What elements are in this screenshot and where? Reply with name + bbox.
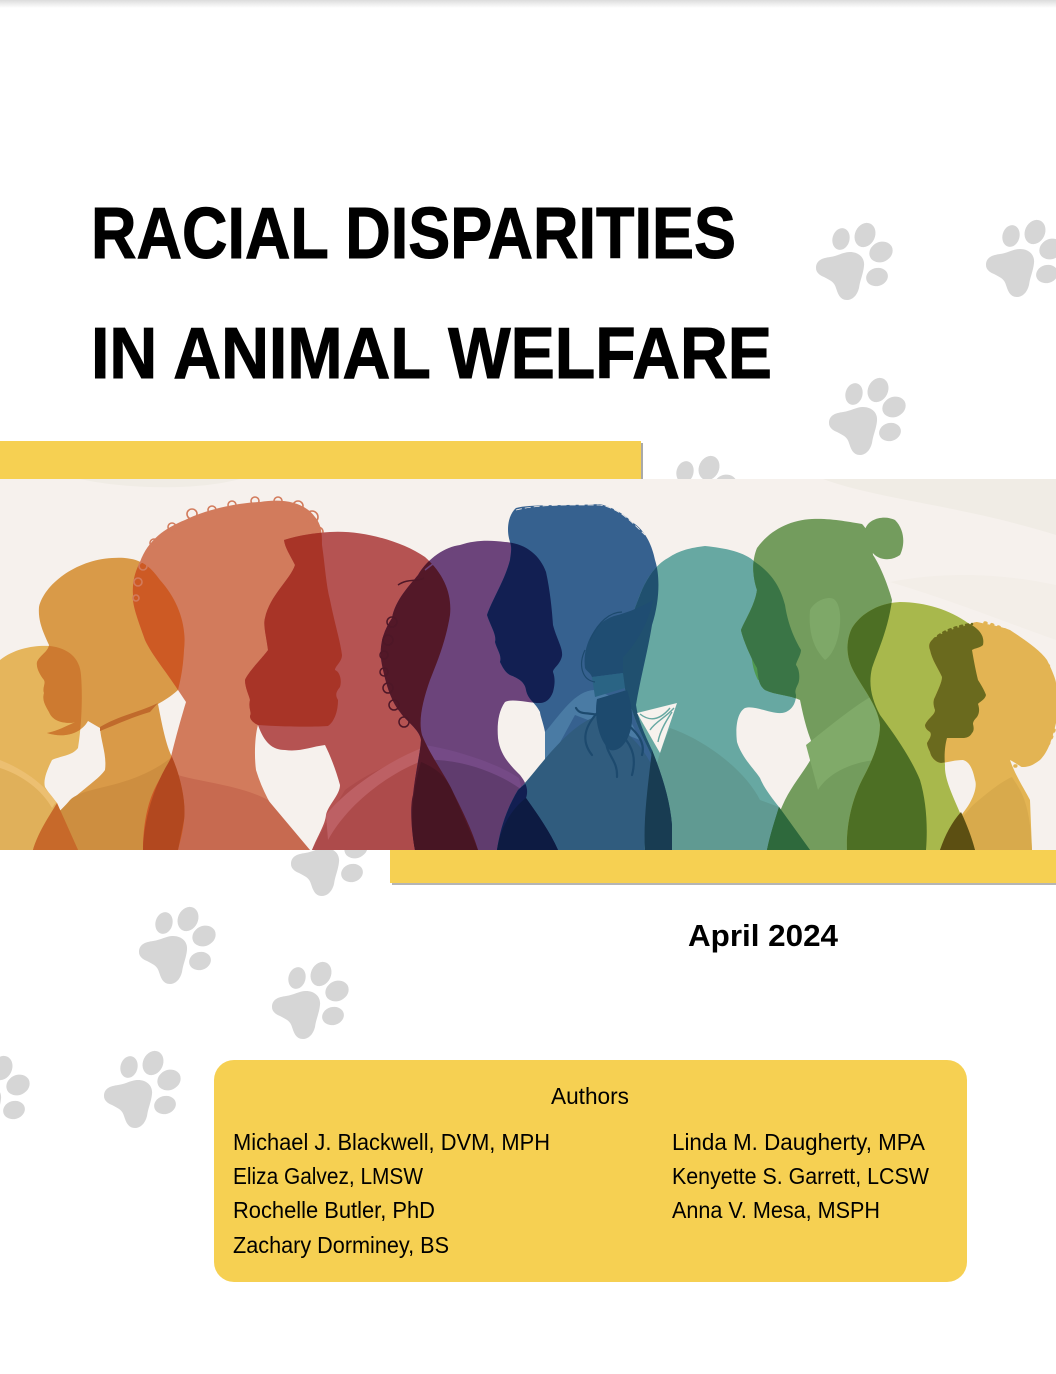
authors left column: Zachary Dorminey, BS xyxy=(233,1232,449,1258)
date: April 2024 xyxy=(688,918,839,953)
panel: authors xyxy=(214,1060,967,1282)
silhouette: yellow person far left xyxy=(0,646,82,850)
silhouette: salmon person with curly hair xyxy=(133,497,342,850)
authors right column: Linda M. Daugherty, MPA xyxy=(672,1129,926,1155)
silhouette: rose person xyxy=(245,532,429,850)
silhouette: olive person xyxy=(846,602,970,850)
authors right column: Anna V. Mesa, MSPH xyxy=(672,1197,880,1223)
image: diverse profile silhouettes xyxy=(0,479,1056,850)
paw prints background xyxy=(0,216,1056,1133)
ponytail of blue person xyxy=(574,609,644,778)
silhouette: green person with bun xyxy=(741,518,904,850)
authors right column: Kenyette S. Garrett, LCSW xyxy=(672,1163,929,1189)
authors right column xyxy=(672,1129,929,1223)
silhouette: golden person with curly hair xyxy=(925,622,1056,850)
yellow bar top xyxy=(0,441,643,479)
silhouette: purple person xyxy=(379,540,534,850)
silhouette: blue person xyxy=(487,504,672,850)
title: IN ANIMAL WELFARE xyxy=(91,314,772,394)
silhouette: orange person xyxy=(33,558,185,850)
heading: authors: Authors xyxy=(551,1083,629,1109)
title xyxy=(91,194,772,394)
authors left column: Michael J. Blackwell, DVM, MPH xyxy=(233,1129,550,1155)
authors left column: Rochelle Butler, PhD xyxy=(233,1197,435,1223)
silhouette: teal person xyxy=(622,546,810,850)
title: RACIAL DISPARITIES xyxy=(91,194,736,274)
yellow bar bottom xyxy=(390,850,1056,885)
authors left column: Eliza Galvez, LMSW xyxy=(233,1163,423,1189)
authors left column xyxy=(233,1129,550,1258)
